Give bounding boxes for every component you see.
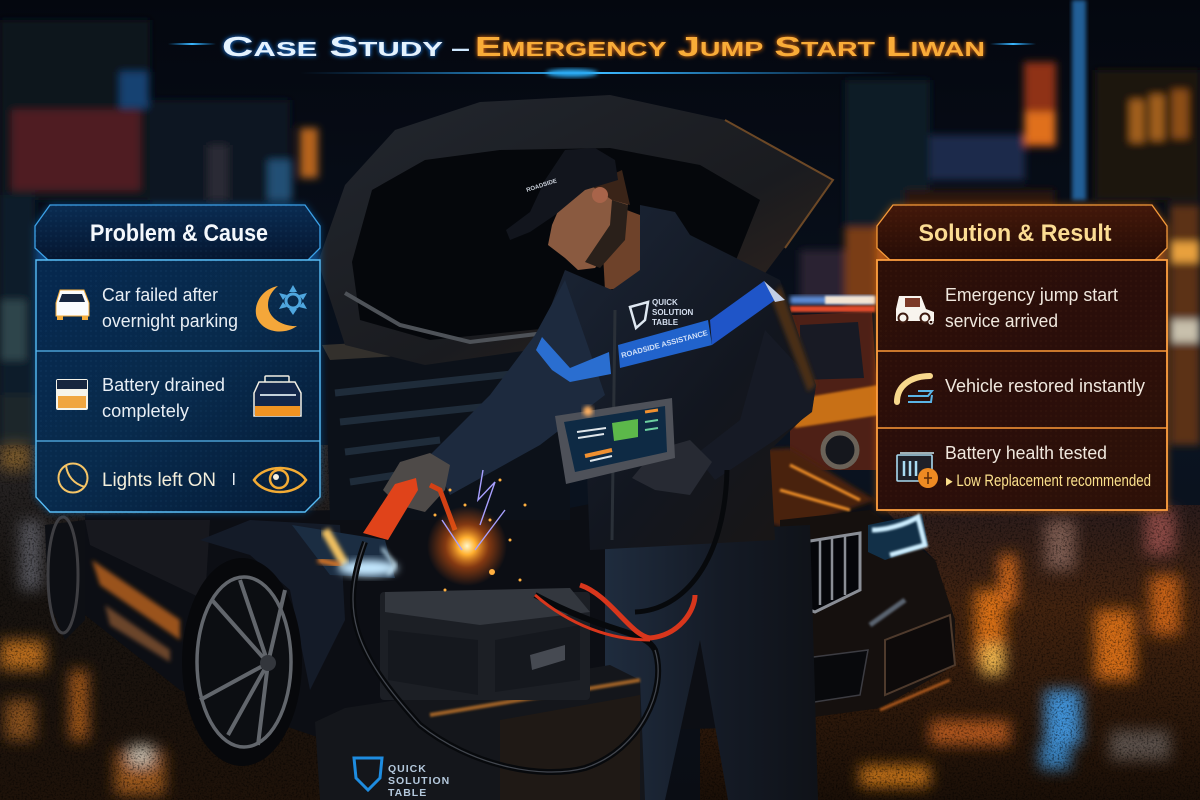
row: jump start service arrived: Emergency jump start [945, 284, 1118, 305]
left headlight [292, 525, 398, 578]
row: battery drained: completely [102, 400, 190, 421]
title [168, 31, 1036, 77]
trousers [605, 525, 818, 800]
left arm [430, 280, 605, 495]
logo on box [354, 758, 450, 799]
title: Case Study [222, 31, 444, 62]
row: jump start service arrived [896, 284, 1118, 331]
row: vehicle restored: Vehicle restored instantly [945, 375, 1146, 396]
right arm [695, 330, 816, 480]
icon: car [56, 290, 89, 320]
car body [45, 330, 955, 766]
row: battery drained: Battery drained [102, 374, 225, 395]
row: battery health tested: ▸ Low Replacement recommended [946, 472, 1151, 490]
row: jump start service arrived: service arrived [945, 310, 1058, 331]
sparks and arc [382, 470, 526, 592]
row: battery drained [56, 374, 301, 421]
icon: battery [254, 376, 301, 416]
row: car failed overnight [56, 284, 307, 332]
panel: solution and result [877, 205, 1167, 510]
icon: service vehicle [896, 296, 934, 324]
panel heading: problem and cause [35, 205, 320, 260]
left blurred buildings [0, 20, 318, 445]
panel heading: solution and result [877, 205, 1167, 260]
row: lights left on [58, 464, 306, 492]
panel glow: solution [877, 205, 1167, 510]
rear wheel [45, 520, 85, 640]
panel heading: solution and result: Solution & Result [918, 220, 1112, 247]
icon: circle gauge [58, 464, 88, 492]
logo on box: QUICK [388, 763, 427, 775]
row: car failed overnight: overnight parking [102, 310, 238, 331]
title: Emergency Jump Start Liwan [475, 31, 985, 62]
jacket logo text: SOLUTION [652, 308, 694, 317]
logo on box: TABLE [388, 787, 427, 799]
police car behind [790, 296, 882, 470]
car side reflections [92, 560, 180, 640]
row: battery health tested: Battery health tested [945, 442, 1107, 463]
fender [200, 520, 345, 690]
jacket logo text [630, 298, 694, 328]
road reflections [0, 445, 1180, 795]
right blurred buildings [800, 62, 1200, 445]
head: ROADSIDE [526, 178, 558, 194]
right wet ground [700, 505, 1200, 800]
jacket logo text: TABLE [652, 318, 679, 327]
panel: problem and cause [35, 205, 320, 512]
right front bumper [730, 510, 955, 728]
jacket logo text: QUICK [652, 298, 678, 307]
engine bay [325, 345, 570, 520]
icon: battery with warning [897, 453, 938, 488]
row: vehicle restored [897, 375, 1146, 402]
front wheel [182, 558, 302, 766]
icon: restored arc [897, 376, 932, 402]
icon: low battery card [56, 379, 88, 410]
wet speckle left [0, 445, 400, 800]
jump-starter boxes [315, 588, 645, 800]
neck [600, 200, 645, 290]
left wet ground [0, 445, 400, 800]
icon: eye [254, 468, 306, 492]
cables [353, 470, 727, 772]
logo on box: SOLUTION [388, 775, 450, 787]
red clamp [363, 478, 455, 540]
icon: moon and sun [256, 285, 307, 332]
row: car failed overnight: Car failed after [102, 284, 218, 305]
title: – [451, 36, 470, 61]
blue reflective stripe [536, 337, 611, 382]
row: battery health tested [897, 442, 1151, 490]
technician [383, 148, 818, 800]
wet speckle right [700, 505, 1200, 800]
hands [383, 453, 450, 512]
right shoulder warm edge [772, 285, 816, 392]
row: lights left on: Lights left ON [102, 470, 216, 491]
jacket torso [530, 205, 816, 550]
panel glow: problem [35, 205, 320, 512]
panel body: solution list [877, 260, 1167, 510]
technician: ROADSIDE ASSISTANCE [620, 328, 709, 360]
zipper [612, 310, 615, 540]
tablet [555, 398, 675, 484]
head [506, 148, 630, 270]
panel body: problem list [36, 260, 320, 512]
blue neon column [1072, 0, 1086, 200]
panel heading: problem and cause: Problem & Cause [90, 220, 268, 247]
open car hood [318, 95, 833, 365]
